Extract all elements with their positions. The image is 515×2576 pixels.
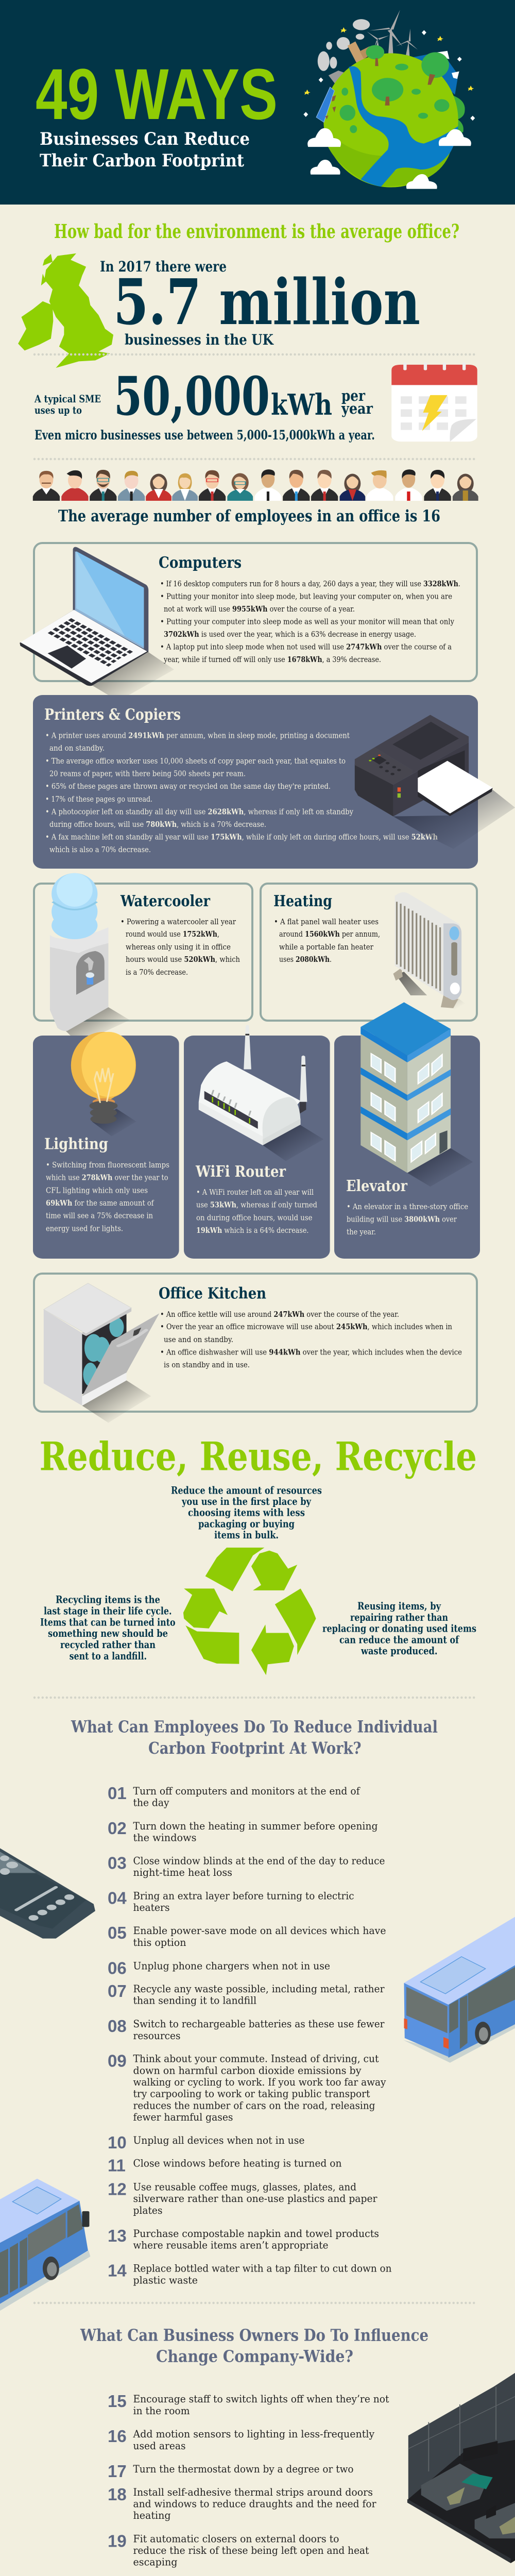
row of 16 employees [33,469,478,501]
tip 13: where reusable items aren’t appropriate [133,2239,329,2251]
text: heating facts: uses 2080kWh. [279,955,332,964]
icon: office building [360,1002,473,1187]
tip 18 [108,2485,376,2521]
text: computers facts: year, while if turned off will only use 1678kWh, a 39% decrease. [163,655,381,664]
text: recycling [40,1594,176,1662]
tip 03: night-time heat loss [133,1866,232,1878]
text: kitchen facts [160,1310,462,1369]
text: watercooler facts: hours would use 520kWh, which [126,955,240,964]
tip 15 [108,2392,389,2417]
text: recycling: something new should be [48,1627,168,1639]
tip 14 [108,2261,392,2286]
tip 12 [108,2180,377,2216]
tip 15: in the room [133,2404,190,2417]
icon: water cooler [50,873,130,1044]
tip 10: Unplug all devices when not in use [133,2134,305,2146]
tip 12: silverware rather than one-use plastics and paper [133,2192,377,2205]
stat: 5.7 million businesses: businesses in the UK [125,331,274,348]
tip 17 [108,2462,353,2481]
text: kitchen facts: • An office kettle will use around 247kWh over the course of the year. [160,1310,399,1319]
tip 18: Install self-adhesive thermal strips around doors [133,2486,373,2498]
text: wifi facts: • A WiFi router left on all year will [196,1188,314,1197]
tip 09 [108,2052,386,2123]
tip 14: plastic waste [133,2274,198,2286]
tip 08: resources [133,2029,180,2042]
text: computers facts: not at work will use 9955kWh over the course of a year. [164,604,355,614]
stat: 50,000 kWh per year: uses up to [35,404,82,416]
text: printers facts: • A photocopier left on standby all day will use 2628kWh, whereas if only left on standby [45,807,353,816]
heading: elevator: Elevator [346,1177,408,1195]
tip 17: 17 [108,2462,127,2481]
tip 07: than sending it to landfill [133,1994,256,2007]
tip 12: 12 [108,2180,127,2199]
tip 18: and windows to reduce draughts and the need for [133,2498,376,2510]
tip 08: 08 [108,2016,127,2036]
tip 05: 05 [108,1923,127,1942]
tip 09: try carpooling to work or taking public transport [133,2088,370,2100]
tip 06: Unplug phone chargers when not in use [133,1959,330,1972]
text: recycling: Recycling items is the [56,1594,160,1606]
text: computers facts [160,579,460,664]
text: wifi facts: use 53kWh, whereas if only turned [196,1200,317,1209]
text: reduce: items in bulk. [214,1529,279,1541]
text: lighting facts: time will see a 75% decrease in [46,1211,153,1220]
tip 03: Close window blinds at the end of the day to reduce [133,1854,385,1867]
subtitle [40,129,250,171]
tip 04 [108,1889,354,1913]
text: lighting facts: energy used for lights. [46,1224,123,1233]
tip 19: 19 [108,2531,127,2550]
tip 14: Replace bottled water with a tap filter to cut down on [133,2262,392,2275]
text: printers facts: • A fax machine left on standby all year will use 175kWh, while if only left on during office hours, will use 52kWh [45,833,438,842]
icon: light bulb [71,1032,136,1137]
tip 18: heating [133,2509,171,2521]
text: watercooler facts: • Powering a watercooler all year [121,917,236,926]
panel: watercooler [34,884,252,1021]
tip 09: down on harmful carbon dioxide emissions by [133,2064,362,2077]
text: printers facts: • 17% of these pages go unread. [45,794,152,804]
text: lighting facts [46,1160,169,1233]
tip 01: the day [133,1797,169,1809]
text: elevator facts: building will use 3800kWh over [347,1215,457,1224]
text: lighting facts: CFL lighting which only uses [46,1186,148,1195]
text: printers facts: and on standby. [49,743,105,753]
stat: 5.7 million businesses [100,258,420,348]
text: watercooler facts: round would use 1752kWh, [126,929,219,939]
stat: 50,000 kWh per year: kWh [271,388,332,422]
text: recycling: recycled rather than [60,1638,156,1651]
tip 08 [108,2016,385,2042]
stat: 50,000 kWh per year: Even micro businesses use between 5,000-15,000kWh a year. [35,428,375,443]
text: wifi facts: 19kWh which is a 64% decrease. [196,1226,309,1235]
text: heating facts: while a portable fan heater [279,942,374,952]
text: reduce [171,1484,322,1541]
tip 14: 14 [108,2261,127,2280]
tip 12: plates [133,2204,163,2216]
icon: laptop [20,547,174,701]
tip 01 [108,1784,360,1809]
heading: employees section: Carbon Footprint At Work? [148,1738,362,1758]
text: elevator facts [347,1202,468,1236]
text: reusing [322,1600,476,1657]
icon: bus [0,1917,515,2311]
tip 05: this option [133,1936,186,1948]
tip 10 [108,2133,305,2152]
map: UK and Ireland [18,253,113,368]
text: reusing: Reusing items, by [357,1600,441,1612]
tip 01: 01 [108,1784,127,1803]
heading: employees section: What Can Employees Do To Reduce Individual [71,1717,438,1736]
tip 19: reduce the risk of these being left open and heat [133,2544,369,2556]
text: reusing: replacing or donating used items [322,1622,476,1635]
header banner [0,0,515,205]
tip 08: Switch to rechargeable batteries as these use fewer [133,2018,385,2030]
title: 49 ways: 49 WAYS [36,54,278,134]
text: reduce: choosing items with less [188,1506,305,1519]
text: heating facts: • A flat panel wall heater uses [274,917,379,926]
text: kitchen facts: • An office dishwasher will use 944kWh over the year, which includes when the device [160,1348,462,1357]
text: heating facts: around 1560kWh per annum, [279,929,380,939]
text: computers facts: • Putting your monitor into sleep mode, but leaving your computer on, when you are [160,591,452,601]
tip 09: fewer harmful gases [133,2111,233,2123]
tip 09: 09 [108,2052,127,2071]
tip 03: 03 [108,1853,127,1872]
text: reduce: packaging or buying [198,1518,295,1530]
stat: 50,000 kWh per year: per [341,387,366,404]
text: computers facts: • If 16 desktop computers run for 8 hours a day, 260 days a year, they will use 3328kWh. [160,579,460,588]
heading: business owners section: Change Company-Wide? [156,2347,353,2366]
tip 12: Use reusable coffee mugs, glasses, plates, and [133,2181,356,2193]
tip 03 [108,1853,385,1878]
tip 16: used areas [133,2439,185,2452]
icon: open plan office [407,2373,515,2563]
tip 18: 18 [108,2485,127,2504]
icon: wifi router [199,1025,323,1161]
tip 17: Turn the thermostat down by a degree or two [133,2463,353,2475]
icon: radiator [393,892,479,1020]
heading: computers: Computers [159,554,242,572]
tip 11: Close windows before heating is turned on [133,2157,342,2170]
tip 19 [108,2531,369,2568]
text: reduce: Reduce the amount of resources [171,1484,322,1496]
heading: lighting: Lighting [44,1136,108,1153]
text: printers facts: which is also a 70% decrease. [49,845,151,854]
tip 02 [108,1819,378,1844]
stat: 5.7 million businesses: In 2017 there were [100,258,227,275]
tip 04: heaters [133,1901,170,1913]
tip 07: Recycle any waste possible, including metal, rather [133,1982,385,1995]
tip 15: 15 [108,2392,127,2411]
icon: phone [0,1848,95,1939]
tip 02: Turn down the heating in summer before opening [133,1820,378,1832]
tip 16: Add motion sensors to lighting in less-frequently [133,2428,375,2440]
heading: employees section [71,1717,438,1758]
panel: office kitchen [34,1274,477,1423]
text: lighting facts: which use 278kWh over the year to [46,1173,168,1182]
stat: 50,000 kWh per year: year [341,400,373,417]
tip 04: Bring an extra layer before turning to electric [133,1890,354,1902]
text: wifi facts [196,1188,317,1235]
panel: heating [261,884,479,1021]
text: lighting facts: 69kWh for the same amount of [46,1198,154,1208]
heading: heating: Heating [273,892,332,910]
heading: printers: Printers & Copiers [44,706,181,724]
text: elevator facts: • An elevator in a three-story office [347,1202,468,1211]
text: computers facts: • A laptop put into sleep mode when not used will use 2747kWh over the course of a [160,642,452,651]
tip 11: 11 [108,2156,126,2175]
text: heating facts [274,917,380,964]
text: printers facts: • 65% of these pages are thrown away or recycled on the same day they're printed. [45,782,331,791]
text: recycling: Items that can be turned into [40,1616,176,1628]
text: reusing: repairing rather than [350,1611,448,1623]
subtitle: Businesses Can Reduce [40,129,250,149]
text: reusing: waste produced. [360,1645,438,1657]
text: printers facts [45,731,438,854]
text: kitchen facts: is on standby and in use. [164,1360,250,1369]
stat: 50,000 kWh per year: 50,000 [114,365,270,428]
tip 13: 13 [108,2226,127,2245]
panel: computers [20,543,477,701]
icon: printer [355,715,515,849]
panel: wifi router [184,1025,330,1259]
text: watercooler facts: whereas only using it in office [126,942,231,952]
tip 09: walking or cycling to work. If you work too far away [133,2076,386,2088]
text: lighting facts: • Switching from fluorescent lamps [46,1160,169,1170]
text: recycling: sent to a landfill. [70,1650,147,1662]
heading: business owners section [80,2325,428,2366]
heading: wifi router: WiFi Router [195,1163,286,1181]
text: computers facts: 3702kWh is used over the year, which is a 63% decrease in energy usage. [164,630,416,639]
text: kitchen facts: • Over the year an office microwave will use about 245kWh, which includes when in [160,1322,452,1331]
text: printers facts: • The average office worker uses 10,000 sheets of copy paper each year, that equates to [45,756,346,766]
tip 11 [108,2156,342,2175]
tip 13: Purchase compostable napkin and towel products [133,2227,379,2240]
tip 19: Fit automatic closers on external doors to [133,2532,339,2545]
heading: watercooler: Watercooler [120,892,211,910]
text: computers facts: • Putting your computer into sleep mode as well as your monitor will mean that only [160,617,454,626]
text: wifi facts: on during office hours, would use [196,1213,313,1222]
heading: business owners section: What Can Business Owners Do To Influence [80,2325,428,2345]
tip 13 [108,2226,379,2251]
tip 09: Think about your commute. Instead of driving, cut [133,2053,379,2065]
tip 04: 04 [108,1889,127,1907]
stat: 5.7 million businesses: 5.7 million [113,265,420,339]
text: watercooler facts: is a 70% decrease. [126,968,188,977]
tip 19: escaping [133,2555,178,2568]
tip 07 [108,1981,385,2007]
tip 02: 02 [108,1819,127,1838]
tip 10: 10 [108,2133,127,2152]
tip 16 [108,2427,375,2452]
tip 06 [108,1958,330,1977]
tip 06: 06 [108,1958,127,1977]
tip 15: Encourage staff to switch lights off when they’re not [133,2393,389,2405]
tip 01: Turn off computers and monitors at the end of [133,1785,360,1797]
text: reduce: you use in the first place by [181,1495,312,1507]
panel: elevator [334,1002,480,1259]
illustration: earth with wind turbines, factory, solar panels [303,10,475,189]
text: kitchen facts: use and on standby. [164,1335,233,1344]
text: recycling: last stage in their life cycle. [44,1605,172,1617]
stat: 50,000 kWh per year [34,365,375,443]
subtitle: Their Carbon Footprint [40,150,244,171]
text: printers facts: • A printer uses around 2491kWh per annum, when in sleep mode, printing a document [45,731,350,740]
text: printers facts: 20 reams of paper, with there being 500 sheets per ream. [49,769,246,778]
heading: average employees: The average number of employees in an office is 16 [58,507,440,526]
tip 02: the windows [133,1832,197,1844]
tip 09: reduces the number of cars on the road, releasing [133,2099,375,2111]
tip 07: 07 [108,1981,127,2001]
text: watercooler facts [121,917,240,977]
list: employee tips [108,1784,392,2286]
text: printers facts: during office hours, will use 780kWh, which is a 70% decrease. [49,820,266,829]
panel: printers and copiers [33,695,515,869]
panel: lighting [33,1032,179,1259]
text: elevator facts: the year. [347,1227,376,1236]
icon: recycle symbol [183,1548,316,1675]
heading: office kitchen: Office Kitchen [159,1285,266,1302]
list: business owner tips [108,2392,392,2576]
icon: calendar with lightning bolt [391,362,477,442]
text: reusing: can reduce the amount of [339,1633,459,1646]
tip 16: 16 [108,2427,127,2446]
tip 05 [108,1923,386,1948]
tip 05: Enable power-save mode on all devices which have [133,1924,386,1937]
stat: 50,000 kWh per year: A typical SME [34,393,101,405]
icon: dishwasher [44,1283,159,1423]
